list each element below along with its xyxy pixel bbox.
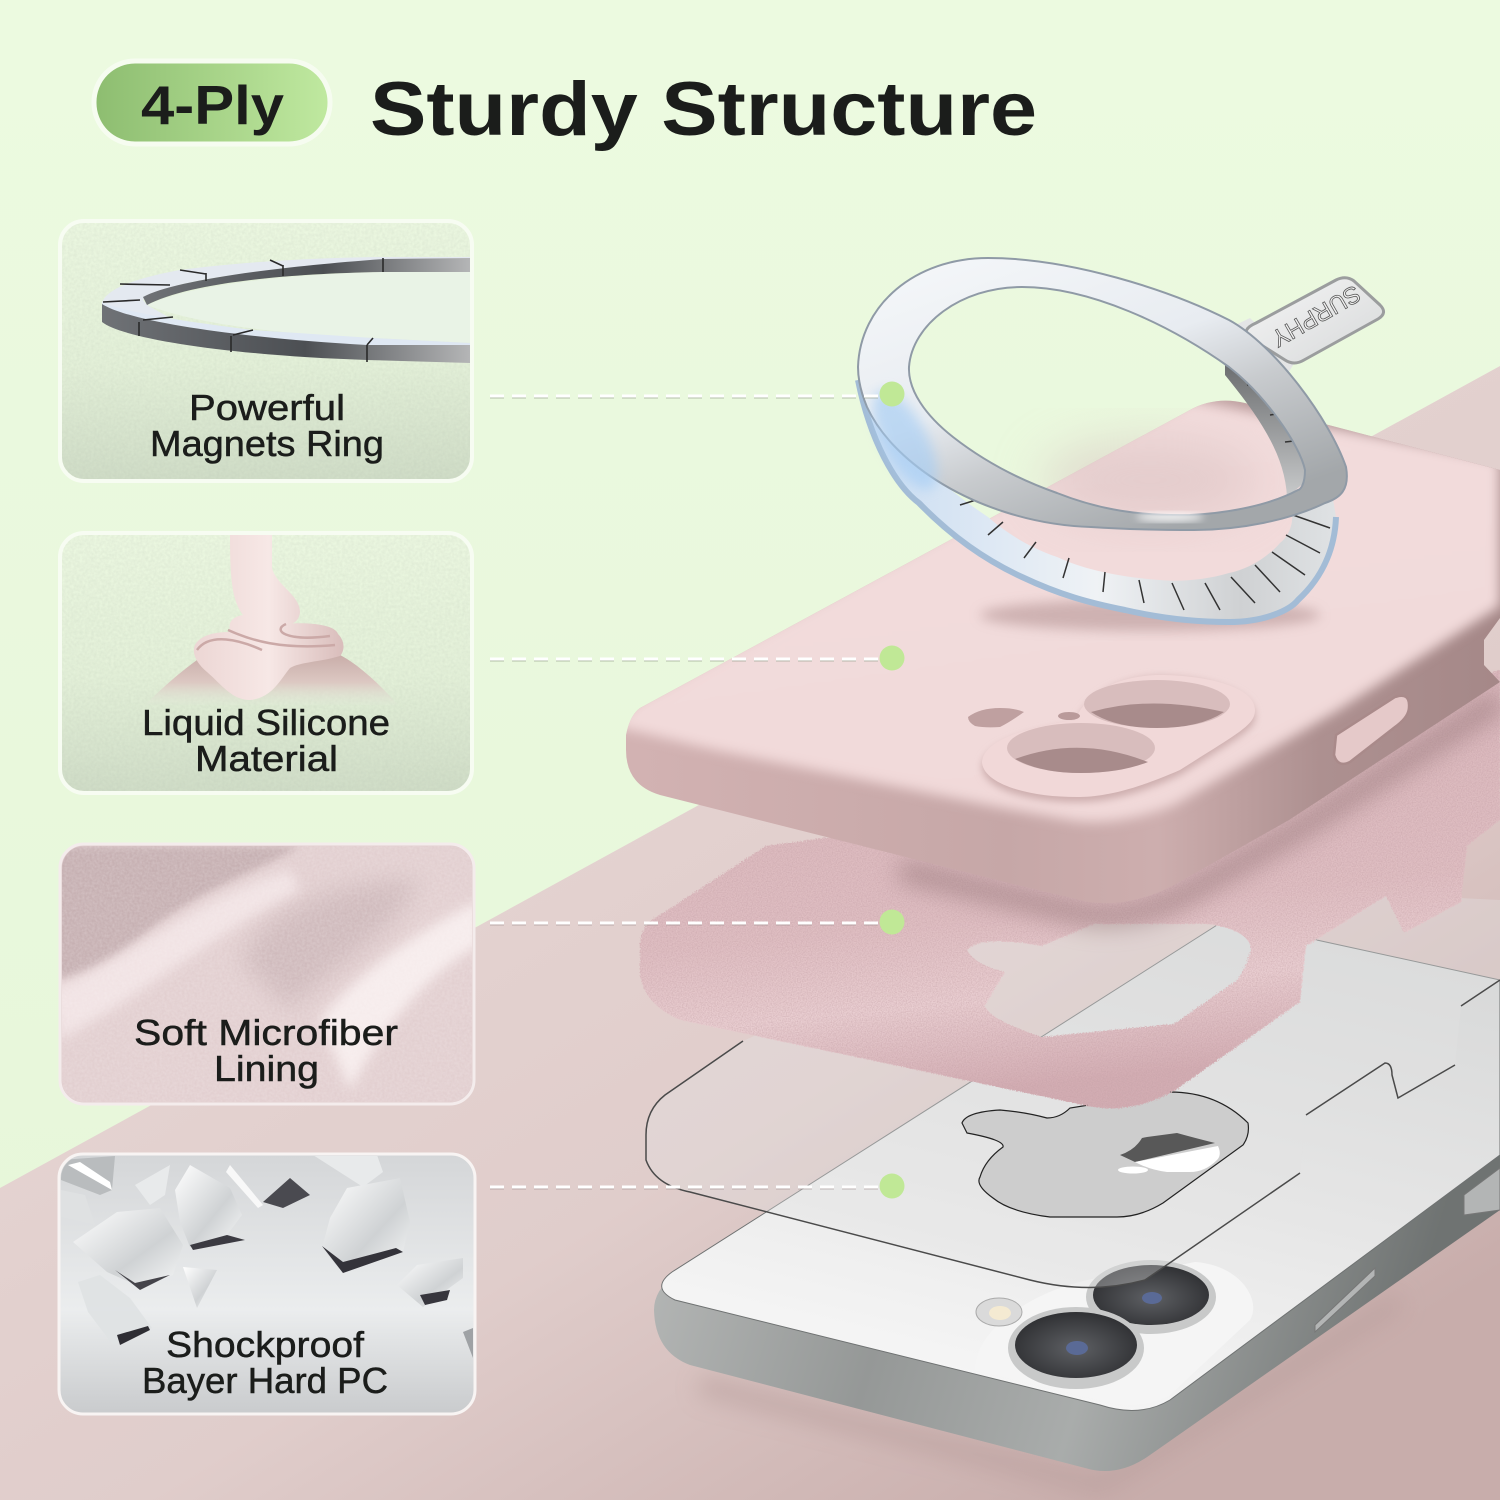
image: microfiber folds: [50, 846, 480, 1102]
callout line: magnets ring: [490, 382, 904, 406]
panel: powerful magnets ring: [60, 221, 472, 481]
layer: clear hard PC shell: [646, 880, 1500, 1288]
icon: segmented magnet ring: [102, 257, 471, 363]
badge: 4-Ply: 4-Ply: [141, 74, 284, 136]
icon: silicone pour: [156, 535, 388, 700]
label: Powerful Magnets Ring: Magnets Ring: [150, 423, 384, 464]
label: Powerful Magnets Ring: Powerful: [189, 387, 345, 428]
panel: shockproof Bayer hard PC: [59, 1154, 475, 1414]
label: Shockproof Bayer Hard PC: [142, 1324, 388, 1401]
layer: silicone case: [600, 380, 1500, 920]
callout dot: [880, 646, 904, 670]
SURPHY tab: [1246, 278, 1384, 363]
SURPHY tab: SURPHY: [1267, 279, 1365, 352]
label: Shockproof Bayer Hard PC: Bayer Hard PC: [142, 1360, 388, 1401]
background: pink diagonal area: [0, 366, 1500, 1500]
label: Powerful Magnets Ring: [150, 387, 384, 464]
label: Soft Microfiber Lining: Lining: [214, 1048, 319, 1089]
connector to tab: [1225, 318, 1295, 378]
phone metal frame: [654, 920, 1500, 1471]
highlight: [1136, 513, 1204, 521]
ring shadow on case: [980, 599, 1320, 631]
label: Soft Microfiber Lining: [134, 1012, 398, 1089]
camera island: [968, 675, 1255, 802]
label: Shockproof Bayer Hard PC: Shockproof: [166, 1324, 365, 1365]
cutout showing phone back: [962, 1092, 1248, 1217]
camera bump: [975, 1262, 1253, 1405]
label: Liquid Silicone Material: Liquid Silicone: [142, 702, 390, 743]
layer: magnetic ring: [858, 258, 1384, 622]
callout line: microfiber: [490, 910, 904, 934]
label: Liquid Silicone Material: [142, 702, 390, 779]
callout dot: [880, 1174, 904, 1198]
inner wall at right of ring: [1225, 362, 1310, 497]
case body with soft shaded wall: [600, 380, 1500, 920]
flash: [976, 1298, 1022, 1326]
magnet segments: [960, 382, 1330, 610]
panel: liquid silicone material: [60, 533, 472, 793]
callout line: liquid silicone: [490, 646, 904, 670]
layer: soft microfiber lining: [640, 670, 1500, 1108]
panel: soft microfiber lining: [50, 844, 480, 1104]
upper ring plate: [858, 258, 1347, 530]
phone shadow: [700, 1300, 1400, 1485]
callout line: hard PC: [490, 1174, 904, 1198]
image: clear crystals: [61, 1155, 473, 1358]
callout dot: [880, 382, 904, 406]
callout dot: [880, 910, 904, 934]
badge: 4-Ply: [94, 61, 330, 144]
label: Soft Microfiber Lining: Soft Microfiber: [134, 1012, 398, 1053]
lens lower: [1008, 1307, 1144, 1389]
title: Sturdy Structure: [370, 67, 1037, 152]
blue glow: [860, 381, 950, 499]
phone: iPhone body: [654, 920, 1500, 1485]
shadow under case: [900, 700, 1500, 916]
icon: apple logo: [1118, 1133, 1220, 1174]
side buttons: [1315, 1168, 1500, 1332]
label: Liquid Silicone Material: Material: [195, 738, 338, 779]
phone back glass: [662, 920, 1500, 1410]
lower magnet arc: [858, 380, 1336, 622]
button cutout: [1334, 696, 1409, 764]
lens upper: [1086, 1260, 1216, 1334]
